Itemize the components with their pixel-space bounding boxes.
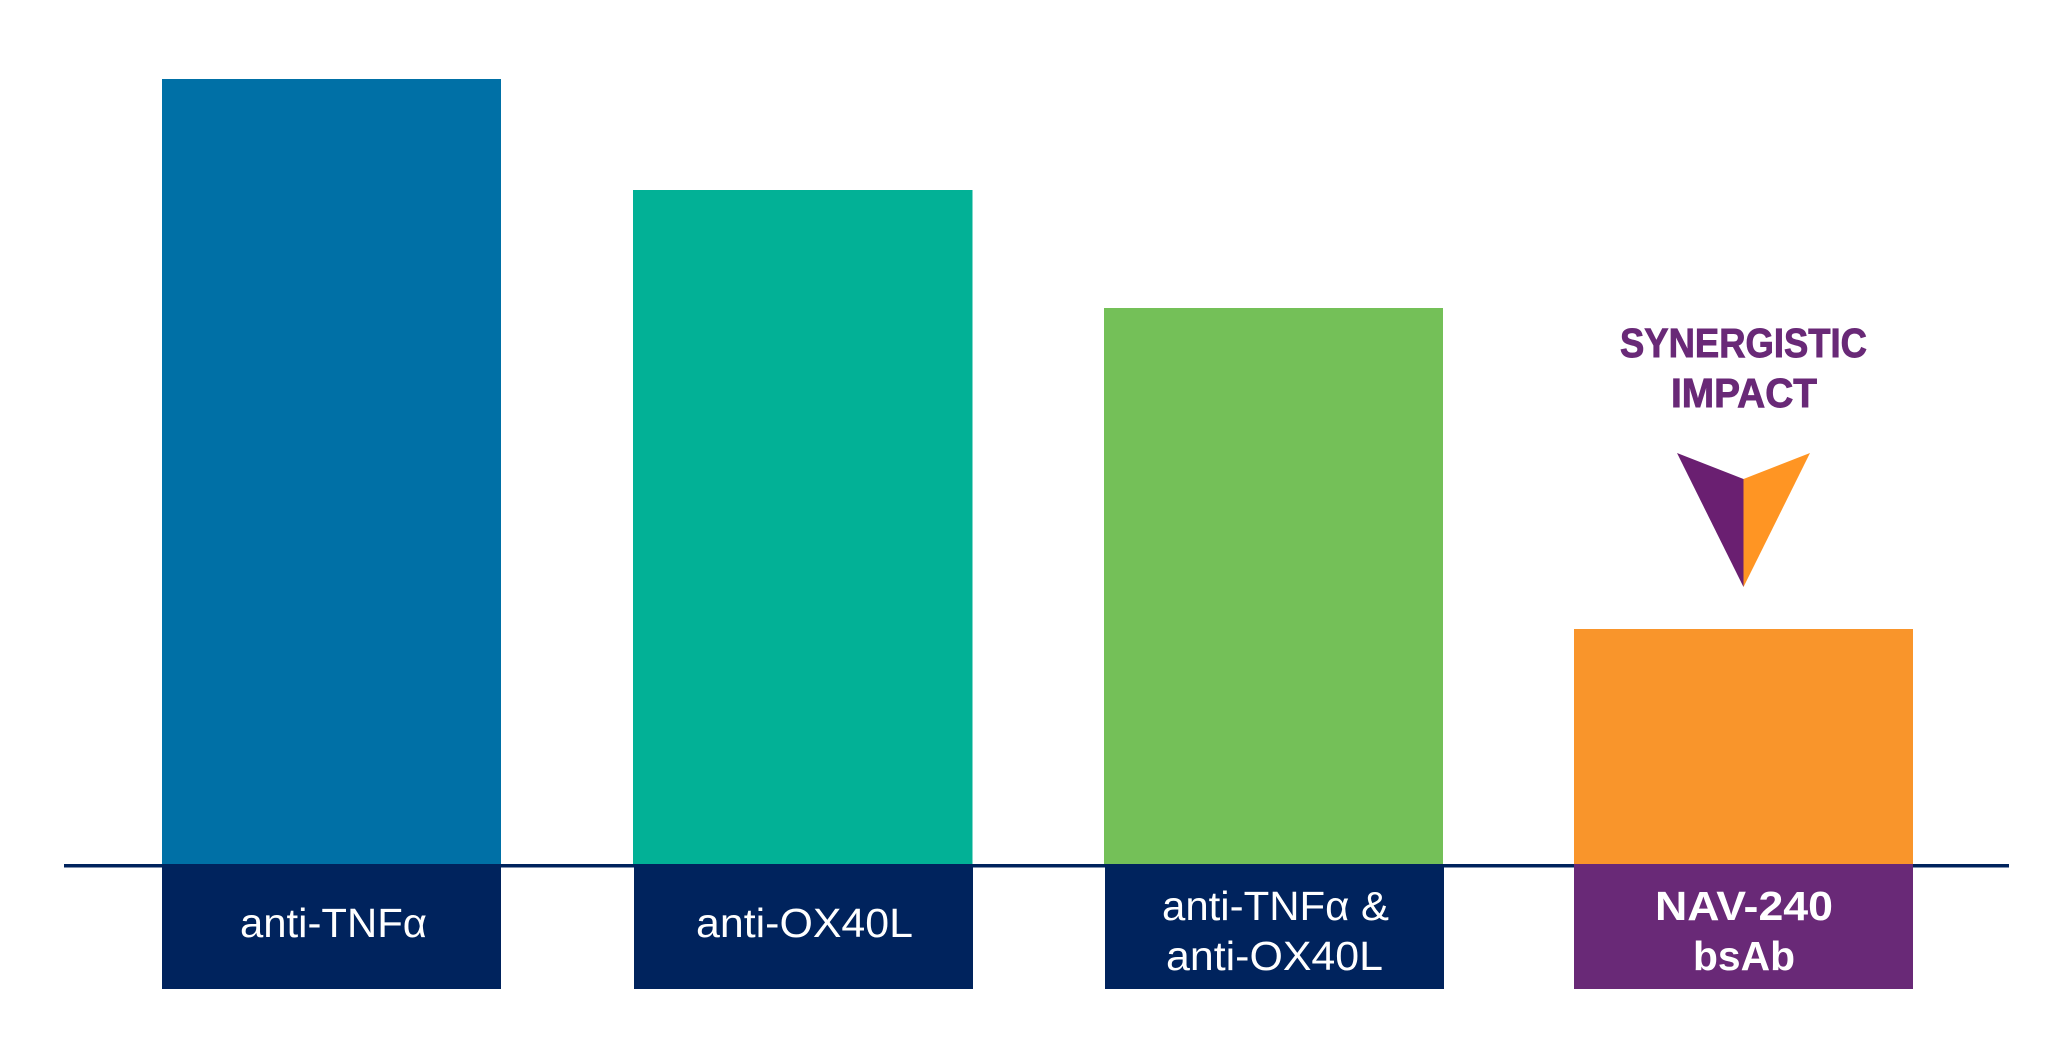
category label: anti-TNFα and anti-OX40L (1105, 864, 1444, 989)
category label: anti-TNFα and anti-OX40L: anti-OX40L (1166, 933, 1383, 979)
category label: anti-TNFα: anti-TNFα (240, 900, 427, 946)
category label: anti-OX40L: anti-OX40L (696, 900, 913, 946)
callout heading: synergistic impact (1620, 320, 1867, 416)
category label: NAV-240 bsAb: bsAb (1693, 933, 1795, 979)
bar: NAV-240 bsAb (1574, 629, 1913, 864)
bar: anti-TNFα and anti-OX40L (1104, 308, 1443, 864)
callout heading: synergistic impact: SYNERGISTIC (1620, 320, 1867, 366)
category label: NAV-240 bsAb (1574, 864, 1913, 989)
category label: anti-OX40L (634, 864, 973, 989)
category label: anti-TNFα (162, 864, 501, 989)
category label: NAV-240 bsAb: NAV-240 (1655, 883, 1833, 929)
bar: anti-TNFα (162, 79, 501, 864)
bar: anti-OX40L (633, 190, 972, 864)
callout heading: synergistic impact: IMPACT (1671, 370, 1817, 416)
icon: down arrow (1677, 453, 1810, 587)
baseline axis (64, 864, 2009, 868)
category label: anti-TNFα and anti-OX40L: anti-TNFα & (1162, 883, 1389, 929)
